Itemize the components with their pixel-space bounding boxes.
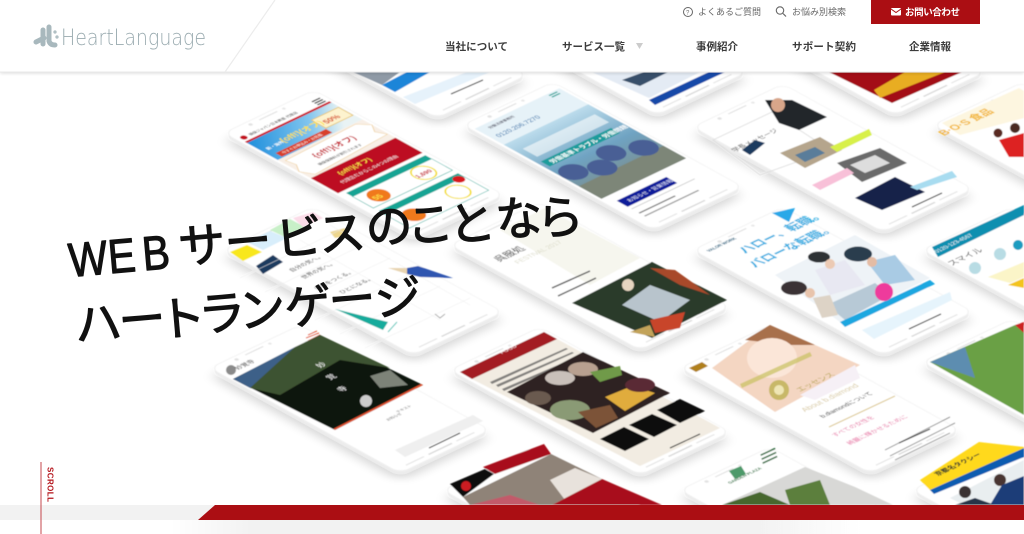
phone: hello job change: ハロー、転職。 bbox=[733, 209, 829, 255]
phones collage bbox=[212, 72, 1024, 505]
phone: top left cropped bbox=[332, 72, 525, 126]
phone: law office medical blue: 0120.206.7270 bbox=[494, 115, 543, 139]
phone: kimono painting: FESTIVAL 2017 bbox=[513, 240, 565, 265]
phone: insurance off campaign: 今すぐお申込み・お見積 bbox=[279, 133, 324, 154]
phone: insurance off campaign: {off!}(オフ) bbox=[309, 134, 359, 159]
phone: hello job change: バローな転職。 bbox=[743, 223, 839, 269]
top link: FAQ: ? bbox=[686, 10, 690, 16]
navigation: 事例紹介 bbox=[696, 40, 738, 53]
headline: ハートランゲージ bbox=[71, 257, 424, 356]
logo: HeartLanguage: HeartLanguage bbox=[61, 26, 206, 51]
phone: taxi yellow: 京都名タクシー bbox=[932, 451, 984, 477]
phone: temple: 寺 bbox=[335, 385, 350, 393]
phone: food restaurant bbox=[452, 332, 728, 482]
phone: insurance off campaign: 損保保険料が割引されます bbox=[315, 143, 364, 166]
phone: temple: 妙覚寺 bbox=[232, 358, 258, 371]
phone: b.diamond esthetic bbox=[672, 325, 968, 481]
phone: paper note with grid: 未来をつくる。 bbox=[312, 269, 356, 291]
phone: hello job change: VALOR WORK bbox=[705, 236, 738, 252]
bottom band bbox=[0, 505, 1024, 534]
phone: b.diamond esthetic: b.diamondについて bbox=[818, 391, 875, 419]
phone: insurance off campaign: 55 bbox=[370, 193, 386, 201]
navigation: サービス一覧 bbox=[562, 40, 626, 53]
scroll indicator: SCROLL bbox=[46, 467, 54, 502]
top link: search: お悩み別検索 bbox=[792, 6, 846, 17]
phone: law office medical blue: 労働法律事務所 bbox=[486, 114, 516, 129]
scroll indicator bbox=[41, 462, 54, 534]
contact button bbox=[871, 0, 980, 24]
phone: temple: 覚 bbox=[323, 373, 339, 381]
phone: BOS food bbox=[935, 88, 1024, 188]
contact button: お問い合わせ bbox=[905, 6, 960, 18]
phone: insurance off campaign: 50% bbox=[321, 114, 343, 125]
navigation: サポート契約 bbox=[792, 40, 856, 53]
phone: taxi yellow bbox=[914, 441, 1024, 505]
phone: insurance off campaign: 損保ジャパン日本興亜 代理店 bbox=[246, 110, 299, 136]
phone: hello job change bbox=[685, 207, 981, 363]
phone: insurance off campaign bbox=[226, 97, 502, 246]
navigation bbox=[445, 40, 952, 53]
phone: insurance off campaign: 代理店だからこの4つの理由 bbox=[338, 154, 401, 185]
headline bbox=[66, 177, 586, 356]
navigation: 企業情報 bbox=[909, 40, 952, 53]
header bar bbox=[0, 0, 1024, 73]
phone: insurance off campaign: 1,690 bbox=[414, 169, 435, 179]
phone: insurance off campaign: {off!}(オフ) bbox=[335, 157, 375, 176]
phone: top centre cropped bbox=[558, 72, 745, 122]
phone: message with photos bbox=[695, 98, 971, 240]
phone: kimono street red bbox=[445, 443, 662, 505]
phone: food restaurant: FOOD bbox=[498, 344, 520, 355]
phone: law office medical blue: 労働基準トラブル・労働問題 bbox=[546, 123, 631, 164]
phone: green plaza: GARDEN PLAZA bbox=[726, 466, 764, 484]
icon: logo mark bbox=[36, 27, 58, 45]
phone: right teal site bbox=[924, 204, 1024, 319]
phone: b.diamond esthetic: 綺麗に輝かせるために bbox=[844, 414, 910, 446]
top link: FAQ: よくあるご質問 bbox=[698, 6, 761, 17]
phone: kimono painting: 呉服処 bbox=[490, 244, 529, 263]
phone: paper note with grid: ひとになる。 bbox=[338, 276, 376, 295]
phone: law office medical blue bbox=[465, 88, 741, 238]
headline: WEB bbox=[66, 225, 172, 288]
phone: b.diamond esthetic: About b.diamond bbox=[799, 383, 861, 413]
phone: message with photos: 学長メッセージ bbox=[729, 128, 781, 153]
phone: temple: お知らせ bbox=[384, 412, 403, 421]
phone: b.diamond esthetic: エッセンス bbox=[794, 371, 838, 393]
phone: insurance off campaign: {off!}(オフ) bbox=[276, 119, 326, 144]
headline: サービスのことなら bbox=[175, 177, 586, 278]
phone: BOS food: B·O·S 食品 bbox=[934, 106, 997, 137]
phone: kimono painting bbox=[452, 208, 728, 358]
phone: green trees right bbox=[924, 321, 1024, 431]
phone: paper note with grid: 世界の気へ。 bbox=[299, 261, 338, 280]
phone: temple bbox=[212, 330, 488, 480]
phone: law office medical blue: お知らせ・営業情報 bbox=[624, 178, 676, 203]
phone: paper note with grid: 自分の気へ。 bbox=[287, 254, 326, 273]
phone: paper note with grid bbox=[225, 212, 501, 362]
phone: green plaza bbox=[682, 447, 892, 505]
phone: insurance off campaign: 新・海外 bbox=[264, 140, 287, 151]
phone: top right cropped red bbox=[796, 72, 983, 122]
phone: temple: テキスト bbox=[394, 404, 413, 413]
phone: right teal site: スマイル bbox=[945, 247, 986, 267]
phone: b.diamond esthetic: すべての女性を bbox=[829, 414, 877, 438]
navigation: 当社について bbox=[445, 40, 508, 53]
phone: temple: 妙 bbox=[313, 361, 329, 369]
phone: right teal site: 0120-123-4567 bbox=[933, 233, 976, 254]
